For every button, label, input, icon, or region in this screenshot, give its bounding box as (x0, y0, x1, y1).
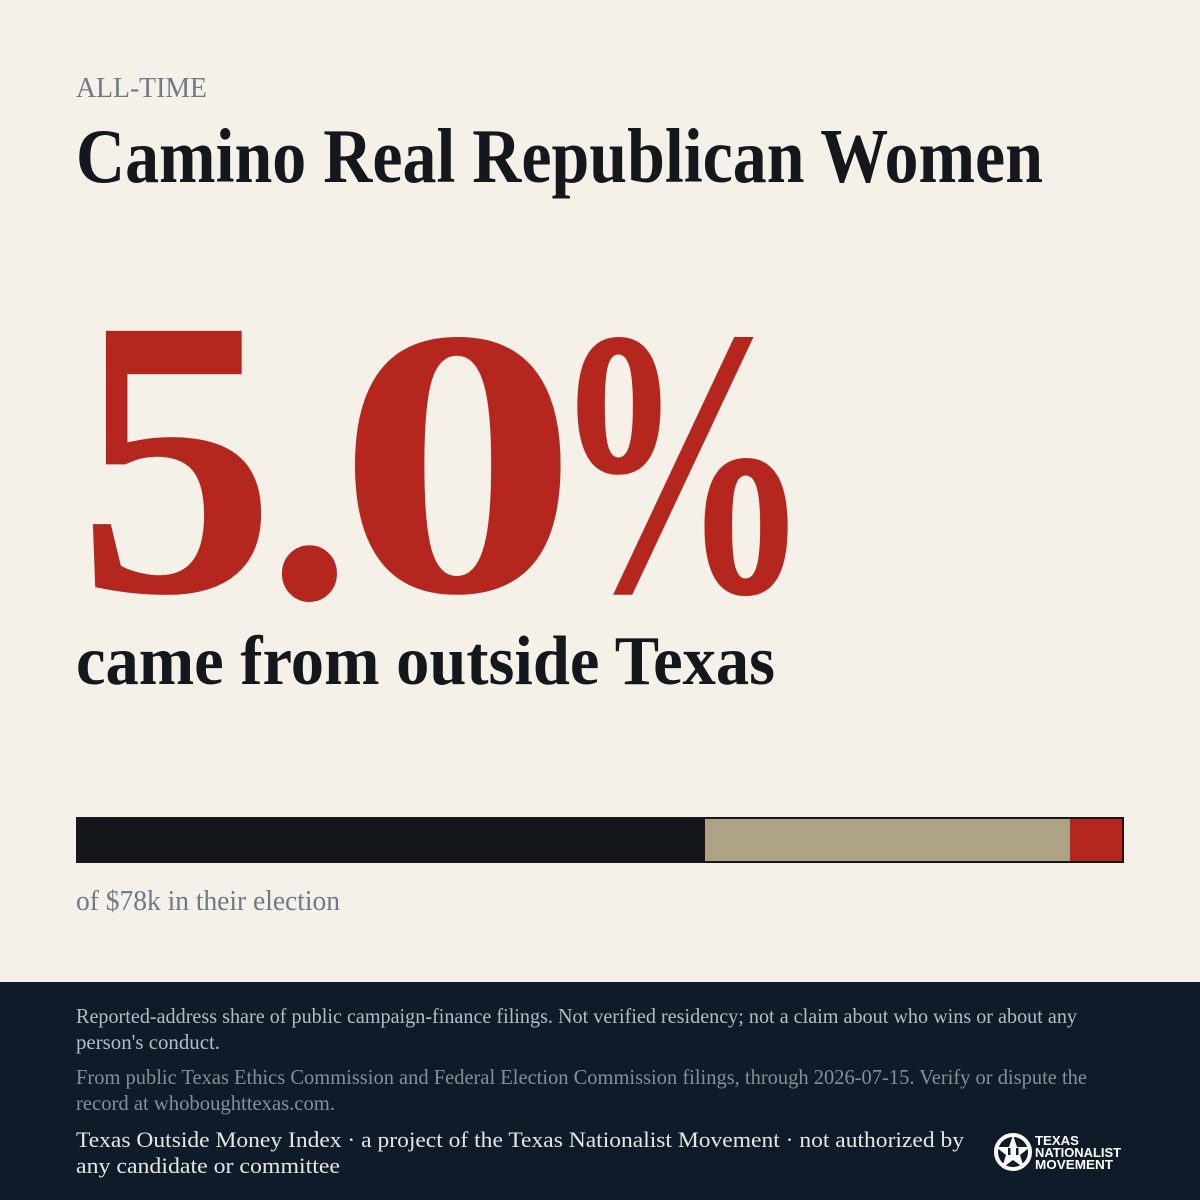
footer panel (0, 982, 1200, 1200)
stacked share bar (76, 817, 1124, 863)
bar caption: of $78k in their election (76, 886, 340, 917)
logo: Texas Nationalist Movement: MOVEMENT (1035, 1158, 1113, 1172)
source note: record at whoboughttexas.com. (76, 1091, 335, 1115)
big percentage: % (550, 250, 812, 674)
disclaimer note: Reported-address share of public campaign-finance filings. Not verified residency; not a claim about who wins or about any (76, 1004, 1077, 1028)
big percentage (77, 237, 812, 677)
big percentage: . (267, 285, 352, 673)
title: Camino Real Republican Women (76, 113, 1043, 199)
eyebrow label: ALL-TIME (76, 72, 207, 104)
subheading: came from outside Texas (76, 623, 775, 700)
attribution (76, 1127, 965, 1178)
logo: Texas Nationalist Movement: NATIONALIST (1035, 1146, 1121, 1160)
attribution: any candidate or committee (76, 1153, 340, 1178)
attribution: Texas Outside Money Index · a project of the Texas Nationalist Movement · not authorized by (76, 1127, 965, 1152)
source note (76, 1065, 1087, 1115)
source note: From public Texas Ethics Commission and Federal Election Commission filings, through 2026-07-15. Verify or dispute the (76, 1065, 1087, 1089)
logo: Texas Nationalist Movement: TEXAS (1035, 1134, 1079, 1148)
big percentage: 5 (77, 237, 276, 677)
big percentage: 0 (336, 252, 579, 674)
logo: Texas Nationalist Movement (996, 1134, 1121, 1172)
disclaimer note: person's conduct. (76, 1030, 220, 1054)
disclaimer note (76, 1004, 1077, 1054)
